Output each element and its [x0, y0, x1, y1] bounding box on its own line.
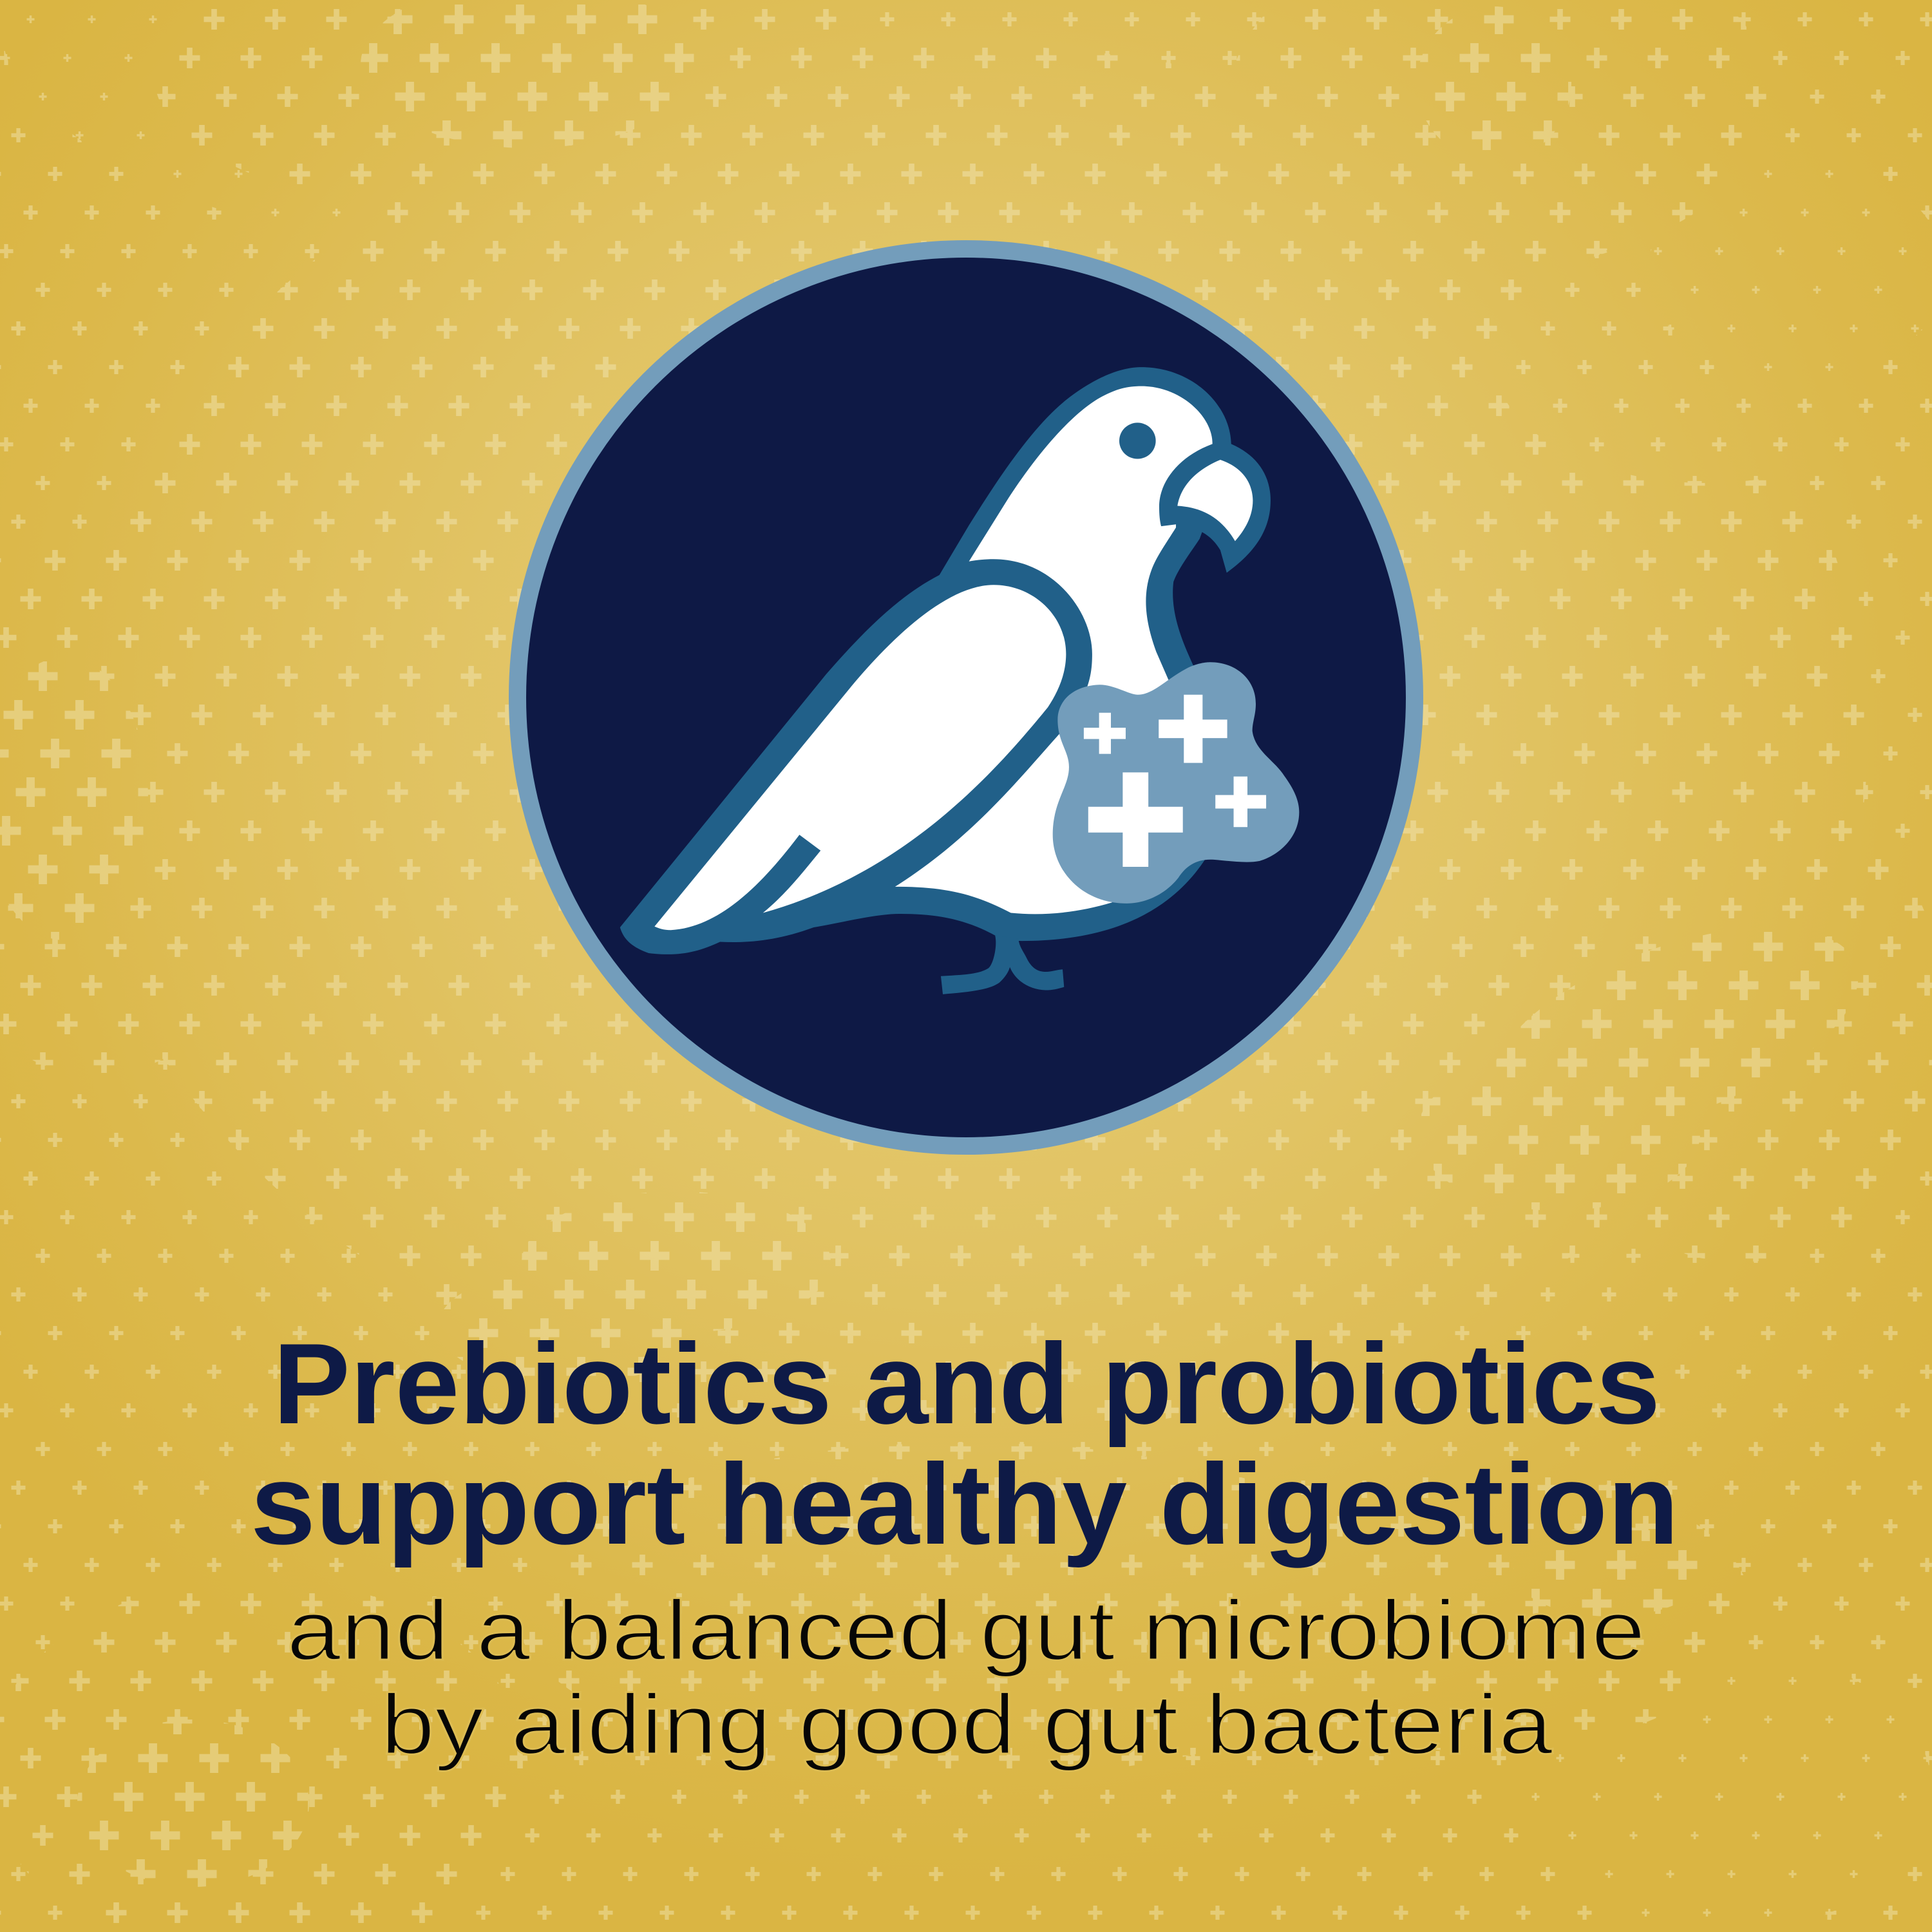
bird eye	[1119, 422, 1156, 459]
subtitle line 1: and a balanced gut microbiome	[287, 1583, 1645, 1678]
white plus signs	[1084, 695, 1266, 867]
bird wing	[654, 585, 1066, 930]
panel: circular badge	[518, 249, 1414, 1146]
title line 1: Prebiotics and probiotics	[273, 1320, 1660, 1448]
bird feet	[941, 936, 1064, 994]
title	[251, 1320, 1679, 1568]
badge ring and disc	[518, 249, 1414, 1146]
title line 2: support healthy digestion	[251, 1440, 1679, 1568]
bird head and body	[895, 386, 1213, 914]
subtitle line 2: by aiding good gut bacteria	[381, 1677, 1553, 1772]
subtitle	[287, 1583, 1645, 1772]
bird beak	[1177, 460, 1253, 541]
icon: bird with probiotic blob	[620, 367, 1299, 994]
bird outline	[620, 367, 1271, 954]
probiotic blob	[1053, 662, 1299, 904]
